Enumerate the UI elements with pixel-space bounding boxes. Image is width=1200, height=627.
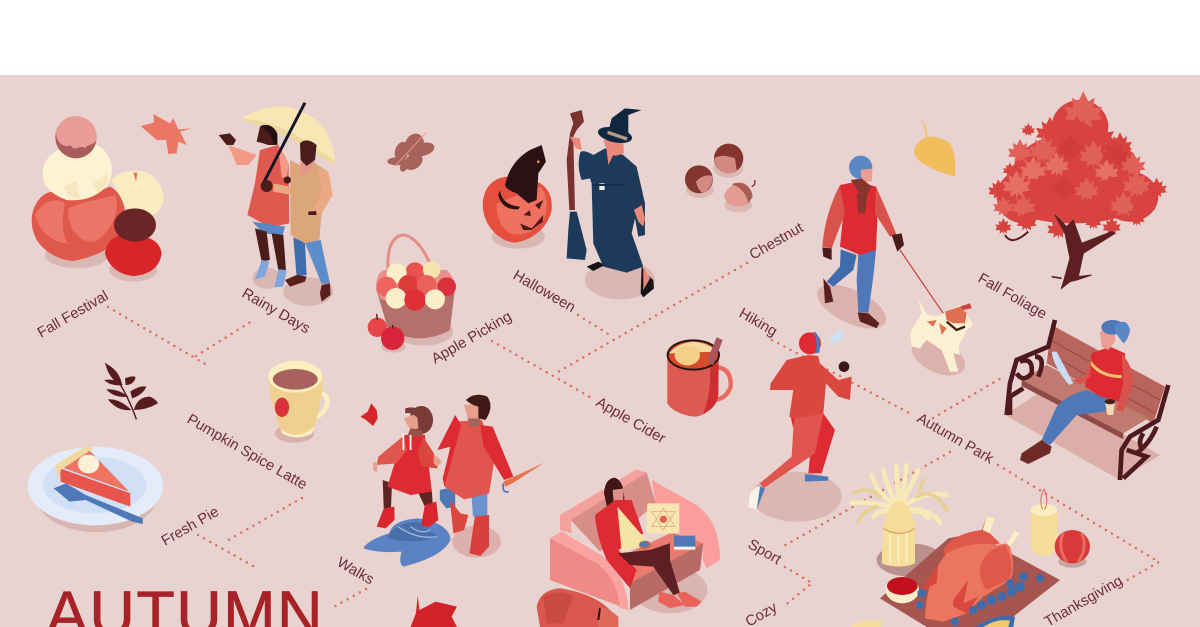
icon: orange maple leaf bbox=[141, 114, 192, 154]
icon: wheat sheaf bbox=[852, 465, 947, 577]
icon: witch with broom bbox=[567, 108, 655, 299]
connector lines bbox=[108, 263, 1159, 609]
icon: mulled cider mug bbox=[667, 337, 731, 417]
icon: red apple bbox=[1055, 530, 1090, 568]
label: Fall Festival: Fall Festival bbox=[35, 288, 111, 341]
label: Fresh Pie: Fresh Pie bbox=[159, 504, 222, 549]
icon: runner with shadow bbox=[748, 330, 852, 522]
label: Pumpkin Spice Latte: Pumpkin Spice Latte bbox=[184, 412, 310, 493]
icon: woman reading in armchair bbox=[550, 469, 720, 613]
icon: woman on park bench bbox=[1005, 320, 1168, 480]
icon: mother and child in puddle bbox=[363, 395, 544, 567]
label: Apple Cider: Apple Cider bbox=[593, 395, 668, 447]
label: Autumn Park: Autumn Park bbox=[914, 411, 997, 468]
icon: hiker with dog on leash bbox=[811, 156, 973, 383]
icon: leaf sprig bbox=[104, 363, 158, 419]
icon: jack-o-lantern with black cat bbox=[483, 145, 552, 249]
label: Apple Picking: Apple Picking bbox=[429, 309, 515, 367]
icon: chestnuts and acorn bbox=[685, 144, 755, 212]
label: Rainy Days: Rainy Days bbox=[239, 286, 313, 337]
icon: roast turkey on board bbox=[850, 517, 1060, 627]
label: Fall Foliage: Fall Foliage bbox=[975, 271, 1049, 323]
icon: couple with umbrella bbox=[219, 103, 335, 306]
icon: small red leaf bbox=[361, 403, 378, 426]
icon: autumn tree bbox=[988, 91, 1167, 288]
label: Walks: Walks bbox=[334, 555, 376, 588]
label: Chestnut: Chestnut bbox=[747, 220, 806, 263]
icon: yellow leaf bbox=[914, 118, 955, 177]
label: Halloween: Halloween bbox=[510, 268, 578, 316]
label: Hiking: Hiking bbox=[736, 306, 780, 340]
icon: apple basket bbox=[368, 235, 456, 353]
label: Sport: Sport bbox=[745, 537, 784, 568]
icon: latte mug bbox=[268, 361, 327, 443]
icon: sleeping dog bbox=[537, 588, 618, 627]
icon: stacked pumpkins bbox=[32, 116, 163, 282]
icon: oak leaf bbox=[387, 131, 436, 173]
icon: red maple leaf bottom bbox=[411, 596, 457, 627]
icon: candle bbox=[1031, 489, 1057, 556]
icon: pie slice on plate bbox=[27, 446, 163, 532]
